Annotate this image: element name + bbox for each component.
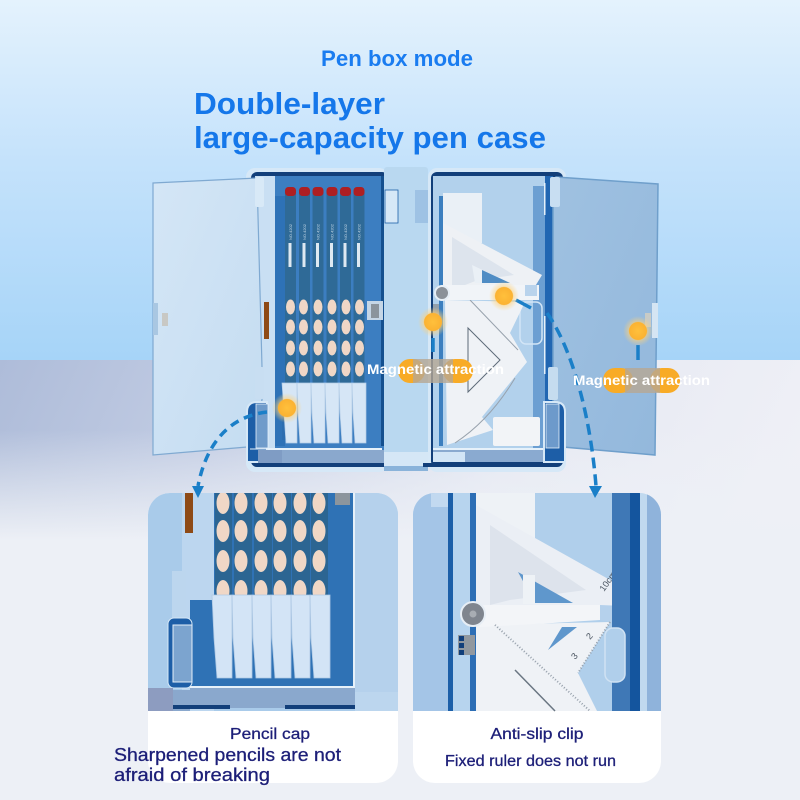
right tray (428, 168, 566, 472)
magnetic attraction label right (573, 368, 710, 393)
arrow heads (192, 486, 602, 498)
base navy segments (278, 463, 557, 467)
detail image: ruler and clip: 2 (584, 631, 595, 641)
panel caption body (114, 744, 341, 785)
title: Double-layer (194, 86, 385, 121)
dashed arrow left (198, 412, 267, 486)
six pencils: NO.4202 (316, 223, 320, 240)
panel caption body: Sharpened pencils are not (114, 744, 341, 765)
six pencils: NO.4202 (343, 223, 348, 240)
panel caption heading: Pencil cap (230, 726, 310, 743)
panel caption heading: Anti-slip clip (490, 726, 584, 743)
short connector dashes (433, 300, 638, 360)
six pencils: NO.4202 (356, 223, 362, 240)
detail image: ruler and clip: 10cm (597, 569, 618, 593)
center spine (384, 167, 428, 471)
panel caption body: Fixed ruler does not run (445, 753, 616, 770)
open pencil case product (153, 167, 710, 486)
six pencils (282, 187, 366, 443)
left door (153, 177, 264, 455)
magnetic attraction label left: Magnetic attraction (367, 361, 504, 377)
dashed arrow right (547, 313, 596, 486)
left tray (246, 168, 388, 472)
six pencils: NO.4202 (330, 223, 334, 240)
panel: anti-slip clip (413, 493, 661, 783)
panel caption body: afraid of breaking (114, 764, 270, 785)
left tray corner (247, 402, 282, 463)
detail image: pencil caps (148, 492, 398, 711)
panel: pencil cap (114, 492, 398, 785)
title (194, 86, 546, 155)
magnet dots (272, 281, 653, 423)
six pencils: NO.4202 (288, 223, 293, 240)
right door (548, 177, 658, 455)
detail image: ruler and clip: 3 (569, 651, 580, 661)
six pencils: NO.4202 (302, 223, 307, 240)
magnetic attraction label left (367, 359, 504, 383)
title: large-capacity pen case (194, 120, 546, 155)
rulers and set square (435, 193, 542, 446)
magnetic attraction label right: Magnetic attraction (573, 372, 710, 388)
detail image: ruler and clip (413, 493, 661, 711)
heading: pen box mode: Pen box mode (321, 46, 473, 71)
right tray corner (544, 402, 565, 462)
